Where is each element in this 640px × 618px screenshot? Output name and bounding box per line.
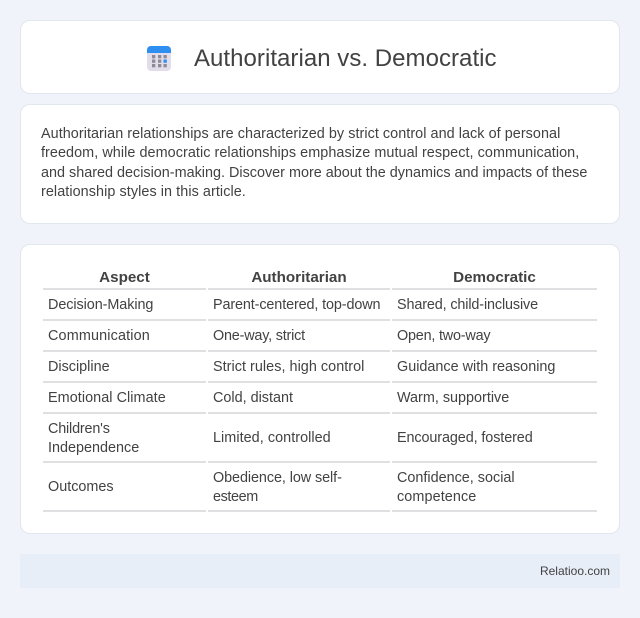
table header: Authoritarian: Authoritarian	[251, 269, 347, 286]
footer bar	[20, 554, 620, 588]
row: Emotional Climate: Emotional Climate	[48, 390, 166, 406]
row: Communication: Communication	[48, 328, 150, 344]
panel: comparison table card	[20, 244, 620, 534]
cell: Obedience, low self-	[213, 470, 342, 486]
introduction text: freedom, while democratic relationships emphasize mutual respect, communication,	[41, 145, 579, 161]
comparison table	[43, 267, 597, 512]
cell: competence	[397, 489, 476, 505]
panel: introduction card	[20, 104, 620, 224]
cell: Encouraged, fostered	[397, 430, 533, 446]
cell: esteem	[213, 489, 258, 505]
cell: Open, two-way	[397, 328, 490, 344]
table header: Democratic: Democratic	[453, 269, 536, 286]
icon: calendar	[147, 46, 171, 71]
row: Children's Independence: Independence	[48, 440, 139, 456]
cell: Warm, supportive	[397, 390, 509, 406]
cell: Shared, child-inclusive	[397, 297, 538, 313]
cell: Guidance with reasoning	[397, 359, 555, 375]
cell: Parent-centered, top-down	[213, 297, 380, 313]
introduction text: relationship styles in this article.	[41, 184, 246, 200]
cell	[213, 470, 342, 505]
row: Discipline: Discipline	[48, 359, 110, 375]
table header: Aspect: Aspect	[99, 269, 150, 286]
row: Children's Independence: Children's	[48, 421, 110, 437]
row: Decision-Making: Decision-Making	[48, 297, 153, 313]
footer text: Relatioo.com	[540, 564, 610, 578]
cell: Cold, distant	[213, 390, 293, 406]
cell: Confidence, social	[397, 470, 515, 486]
cell: Strict rules, high control	[213, 359, 364, 375]
cell: One-way, strict	[213, 328, 305, 344]
panel: title card	[20, 20, 620, 94]
introduction text: Authoritarian relationships are characterized by strict control and lack of personal	[41, 126, 560, 142]
row: Children's Independence	[48, 421, 139, 456]
title: Authoritarian vs. Democratic	[194, 44, 497, 72]
cell: Limited, controlled	[213, 430, 331, 446]
row: Outcomes: Outcomes	[48, 479, 114, 495]
introduction text	[41, 126, 587, 200]
introduction text: and shared decision-making. Discover more about the dynamics and impacts of these	[41, 165, 587, 181]
cell	[397, 470, 515, 505]
